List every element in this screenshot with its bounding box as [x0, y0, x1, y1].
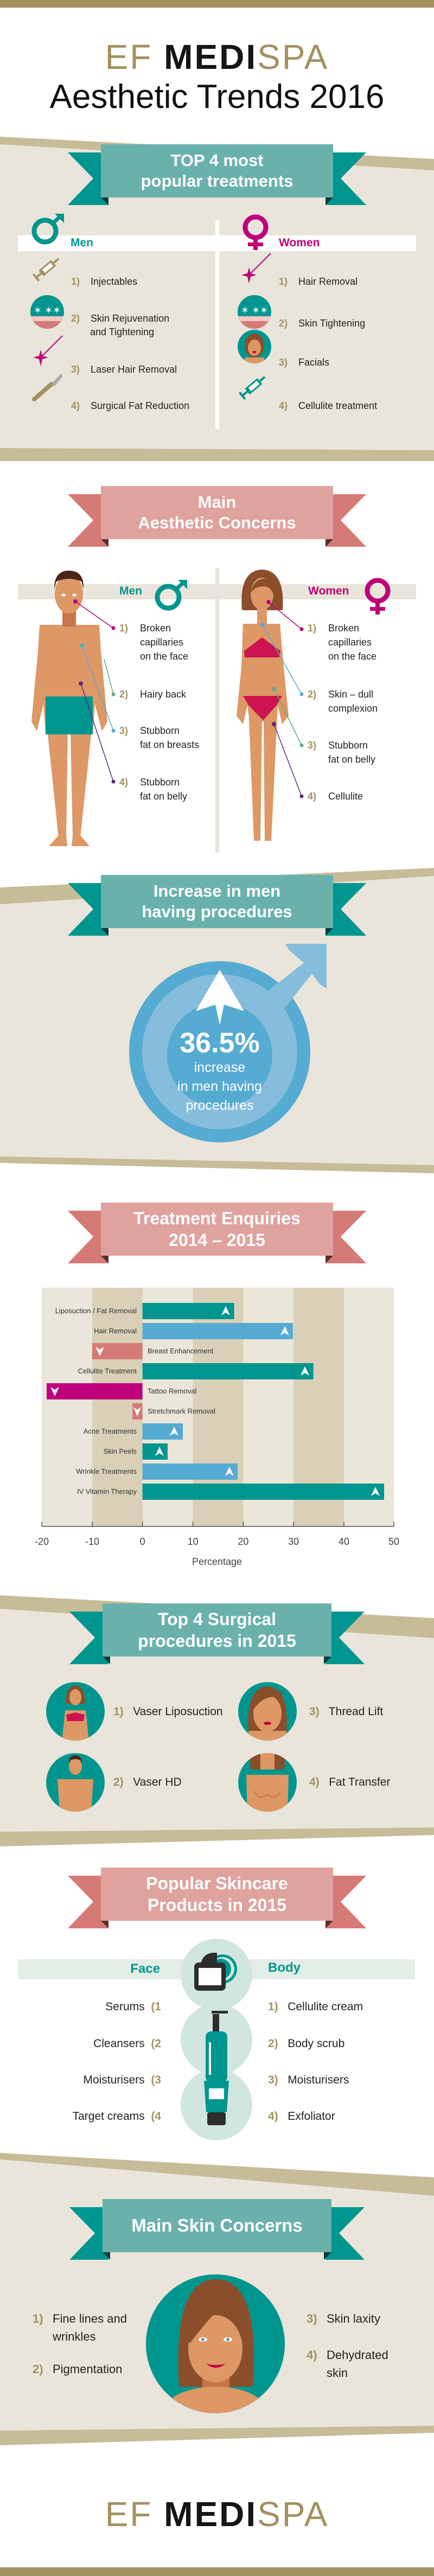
- heading: women concerns: Women: [308, 585, 349, 597]
- ribbon: popular skincare: Products in 2015: [148, 1895, 286, 1915]
- list: face products: Target creams (4: [73, 2110, 161, 2123]
- list: women concerns: capillaries: [328, 637, 372, 648]
- stat text: increase: [194, 1060, 245, 1075]
- list: men concerns: Stubborn: [140, 777, 180, 788]
- stat text: procedures: [186, 1098, 254, 1113]
- icon: chest: [238, 1753, 297, 1812]
- icon: skin circle: [238, 295, 271, 329]
- list: men treatments: 1) Injectables: [71, 276, 137, 287]
- list: women concerns: fat on belly: [328, 754, 375, 765]
- figure: man: [31, 571, 107, 846]
- list: face products: [73, 2000, 161, 2123]
- bar chart: treatment enquiries: Wrinkle Treatments: [76, 1467, 137, 1475]
- list: men concerns: 1): [119, 623, 128, 634]
- list: skin concerns left: [33, 2312, 127, 2376]
- stat text: in men having: [177, 1079, 262, 1094]
- list: men concerns: capillaries: [140, 637, 183, 648]
- list: men concerns: fat on breasts: [140, 739, 199, 750]
- top gold bar: [0, 0, 434, 8]
- list: women concerns: Stubborn: [328, 740, 368, 751]
- list: skin concerns right: skin: [327, 2366, 348, 2380]
- bar chart: treatment enquiries: Liposuction / Fat Removal: [55, 1307, 137, 1315]
- list: women treatments: 2) Skin Tightening: [279, 318, 365, 329]
- bar: face/body header: [18, 1959, 415, 1979]
- ribbon: main skin concerns: [69, 2199, 365, 2260]
- ribbon: main aesthetic concerns: Main: [198, 493, 236, 512]
- heading: men concerns: Men: [119, 585, 142, 597]
- list: men concerns: [119, 623, 199, 802]
- list: women treatments: 1) Hair Removal: [279, 276, 358, 287]
- ribbon: treatment enquiries: 2014 – 2015: [169, 1230, 265, 1250]
- list: men treatments: 3) Laser Hair Removal: [71, 364, 177, 375]
- list: men concerns: Broken: [140, 623, 171, 634]
- bar chart: treatment enquiries: Breast Enhancement: [148, 1347, 213, 1355]
- icon: male symbol: [31, 214, 64, 244]
- list: surgical procedures: 3) Thread Lift: [309, 1705, 383, 1718]
- stat text: [177, 1027, 262, 1113]
- bar chart: treatment enquiries: 10: [188, 1536, 199, 1547]
- ribbon: main skin concerns: Main Skin Concerns: [131, 2215, 303, 2235]
- list: body products: 3) Moisturisers: [268, 2074, 349, 2086]
- ribbon: top 4 surgical: [69, 1603, 365, 1664]
- list: women concerns: Cellulite: [328, 791, 363, 802]
- connector lines: concerns: [73, 599, 304, 798]
- list: skin concerns left: wrinkles: [53, 2330, 95, 2343]
- ribbon: increase in men: Increase in men: [154, 881, 280, 900]
- ribbon: top 4 surgical: Top 4 Surgical: [158, 1609, 276, 1629]
- icon: female symbol: [243, 215, 268, 250]
- bar chart: treatment enquiries: 40: [339, 1536, 349, 1547]
- list: skin concerns left: 1): [33, 2312, 43, 2325]
- list: women concerns: 2): [308, 689, 316, 700]
- list: surgical procedures: [46, 1682, 391, 1812]
- icon: syringe teal: [239, 376, 266, 400]
- list: surgical procedures: 4) Fat Transfer: [309, 1776, 390, 1788]
- label: Women: Women: [279, 236, 320, 249]
- bar chart: treatment enquiries: Cellulite Treatment: [78, 1367, 137, 1375]
- ribbon: main aesthetic concerns: [68, 486, 366, 547]
- ribbon: treatment enquiries: Treatment Enquiries: [133, 1209, 301, 1228]
- tube: [204, 2081, 229, 2125]
- list: women concerns: Broken: [328, 623, 359, 634]
- bar chart: treatment enquiries: Acne Treatments: [84, 1427, 137, 1435]
- icon: woman torso: [46, 1682, 105, 1741]
- ribbon: top 4 treatments: popular treatments: [141, 171, 293, 190]
- divider: [215, 220, 219, 429]
- heading: Body: Body: [268, 1960, 301, 1975]
- list: women concerns: 4): [308, 791, 316, 802]
- bar chart: treatment enquiries: Percentage: [192, 1556, 242, 1567]
- icon: face: [238, 330, 271, 363]
- bar chart: treatment enquiries: Stretchmark Removal: [148, 1407, 215, 1415]
- list: women treatments: 4) Cellulite treatment: [279, 400, 377, 411]
- list: women treatments: 3) Facials: [279, 357, 329, 368]
- list: skin concerns right: Dehydrated: [327, 2348, 388, 2362]
- list: skin concerns left: Pigmentation: [53, 2362, 122, 2376]
- ribbon: increase in men: having procedures: [142, 902, 292, 921]
- ribbon: increase in men: [68, 875, 366, 936]
- bar chart: treatment enquiries: 20: [238, 1536, 248, 1547]
- list: men treatments: [30, 258, 189, 411]
- list: men treatments: and Tightening: [90, 327, 154, 337]
- stat text: 36.5%: [180, 1027, 260, 1059]
- list: men concerns: 2): [119, 689, 128, 700]
- list: men concerns: fat on belly: [140, 791, 187, 802]
- bar chart: treatment enquiries: 0: [140, 1536, 145, 1547]
- bar chart: treatment enquiries: 50: [388, 1536, 399, 1547]
- list: women concerns: Skin – dull: [328, 689, 373, 700]
- list: women concerns: on the face: [328, 651, 376, 662]
- list: men concerns: 4): [119, 777, 128, 788]
- ribbon: top 4 treatments: [68, 144, 366, 205]
- list: body products: [268, 2000, 363, 2123]
- list: skin concerns right: 3): [307, 2312, 317, 2325]
- ribbon: top 4 surgical: procedures in 2015: [138, 1631, 296, 1651]
- list: face products: Serums (1: [105, 2000, 161, 2013]
- list: skin concerns right: 4): [307, 2348, 317, 2362]
- list: men concerns: 3): [119, 725, 128, 736]
- list: men concerns: Hairy back: [140, 689, 186, 700]
- list: women treatments: [238, 253, 377, 411]
- ribbon: treatment enquiries: [68, 1203, 366, 1263]
- icon: laser: [33, 335, 63, 366]
- list: surgical procedures: 2) Vaser HD: [113, 1776, 182, 1788]
- icon column: skincare products: [181, 1939, 252, 2140]
- bar chart: treatment enquiries: -10: [85, 1536, 99, 1547]
- ribbon: popular skincare: Popular Skincare: [146, 1874, 288, 1893]
- divider: [215, 568, 219, 853]
- icon: skin circle: ✶ ✶✶: [241, 305, 268, 316]
- list: women concerns: [308, 623, 378, 802]
- list: skin concerns left: 2): [33, 2362, 43, 2376]
- icon: skin circle: ✶ ✶✶: [34, 305, 61, 316]
- list: women concerns: 3): [308, 740, 316, 751]
- bar chart: treatment enquiries: -20: [35, 1536, 49, 1547]
- icon: male symbol stat circle: [129, 944, 327, 1142]
- icon: scalpel: [32, 373, 62, 401]
- heading: women concerns: [308, 578, 391, 615]
- list: body products: 2) Body scrub: [268, 2037, 344, 2050]
- icon: woman face portrait: [146, 2274, 285, 2413]
- icon: skin circle: [30, 295, 64, 329]
- heading: Face: Face: [130, 1961, 160, 1976]
- title: Aesthetic Trends 2016: [50, 78, 384, 116]
- ribbon: main aesthetic concerns: Aesthetic Concerns: [138, 513, 296, 532]
- list: face products: Moisturisers (3: [83, 2074, 161, 2086]
- list: men concerns: Stubborn: [140, 725, 180, 736]
- list: women concerns: complexion: [328, 703, 378, 714]
- ribbon: popular skincare: [68, 1868, 366, 1928]
- list: face products: Cleansers (2: [93, 2037, 161, 2050]
- heading: men concerns: [119, 580, 187, 611]
- list: men concerns: on the face: [140, 651, 188, 662]
- list: skin concerns left: Fine lines and: [53, 2312, 127, 2325]
- footer logo: EF MEDISPA: [105, 2495, 329, 2534]
- icon: laser magenta: [241, 253, 271, 284]
- icon: syringe gold: [33, 258, 60, 282]
- bottom gold bar: [0, 2567, 434, 2576]
- ribbon: top 4 treatments: TOP 4 most: [170, 151, 264, 170]
- icon: man torso: [46, 1753, 105, 1812]
- list: surgical procedures: 1) Vaser Liposuction: [113, 1705, 223, 1718]
- figure: woman: [237, 570, 289, 841]
- icon: woman face: [238, 1682, 297, 1741]
- bar chart: treatment enquiries: Tattoo Removal: [148, 1387, 196, 1395]
- logo header: EF MEDISPA: [105, 37, 329, 76]
- list: body products: 1) Cellulite cream: [268, 2000, 363, 2013]
- list: men treatments: 2) Skin Rejuvenation: [71, 313, 169, 324]
- bar chart: treatment enquiries: Hair Removal: [94, 1327, 137, 1335]
- bar chart: treatment enquiries: 30: [288, 1536, 299, 1547]
- list: skin concerns right: [307, 2312, 388, 2380]
- bar chart: treatment enquiries: Skin Peels: [104, 1447, 137, 1455]
- list: men treatments: 4) Surgical Fat Reduction: [71, 400, 189, 411]
- bar chart: treatment enquiries: IV Vitamin Therapy: [77, 1487, 137, 1495]
- list: skin concerns right: Skin laxity: [327, 2312, 380, 2325]
- list: women concerns: 1): [308, 623, 316, 634]
- list: body products: 4) Exfoliator: [268, 2110, 335, 2123]
- arrow up: [196, 970, 244, 1025]
- label: Men: Men: [71, 236, 93, 249]
- bar chart: treatment enquiries: [35, 1288, 399, 1567]
- panel: men/women header bar: [18, 235, 416, 251]
- bar: concerns header: [18, 584, 416, 599]
